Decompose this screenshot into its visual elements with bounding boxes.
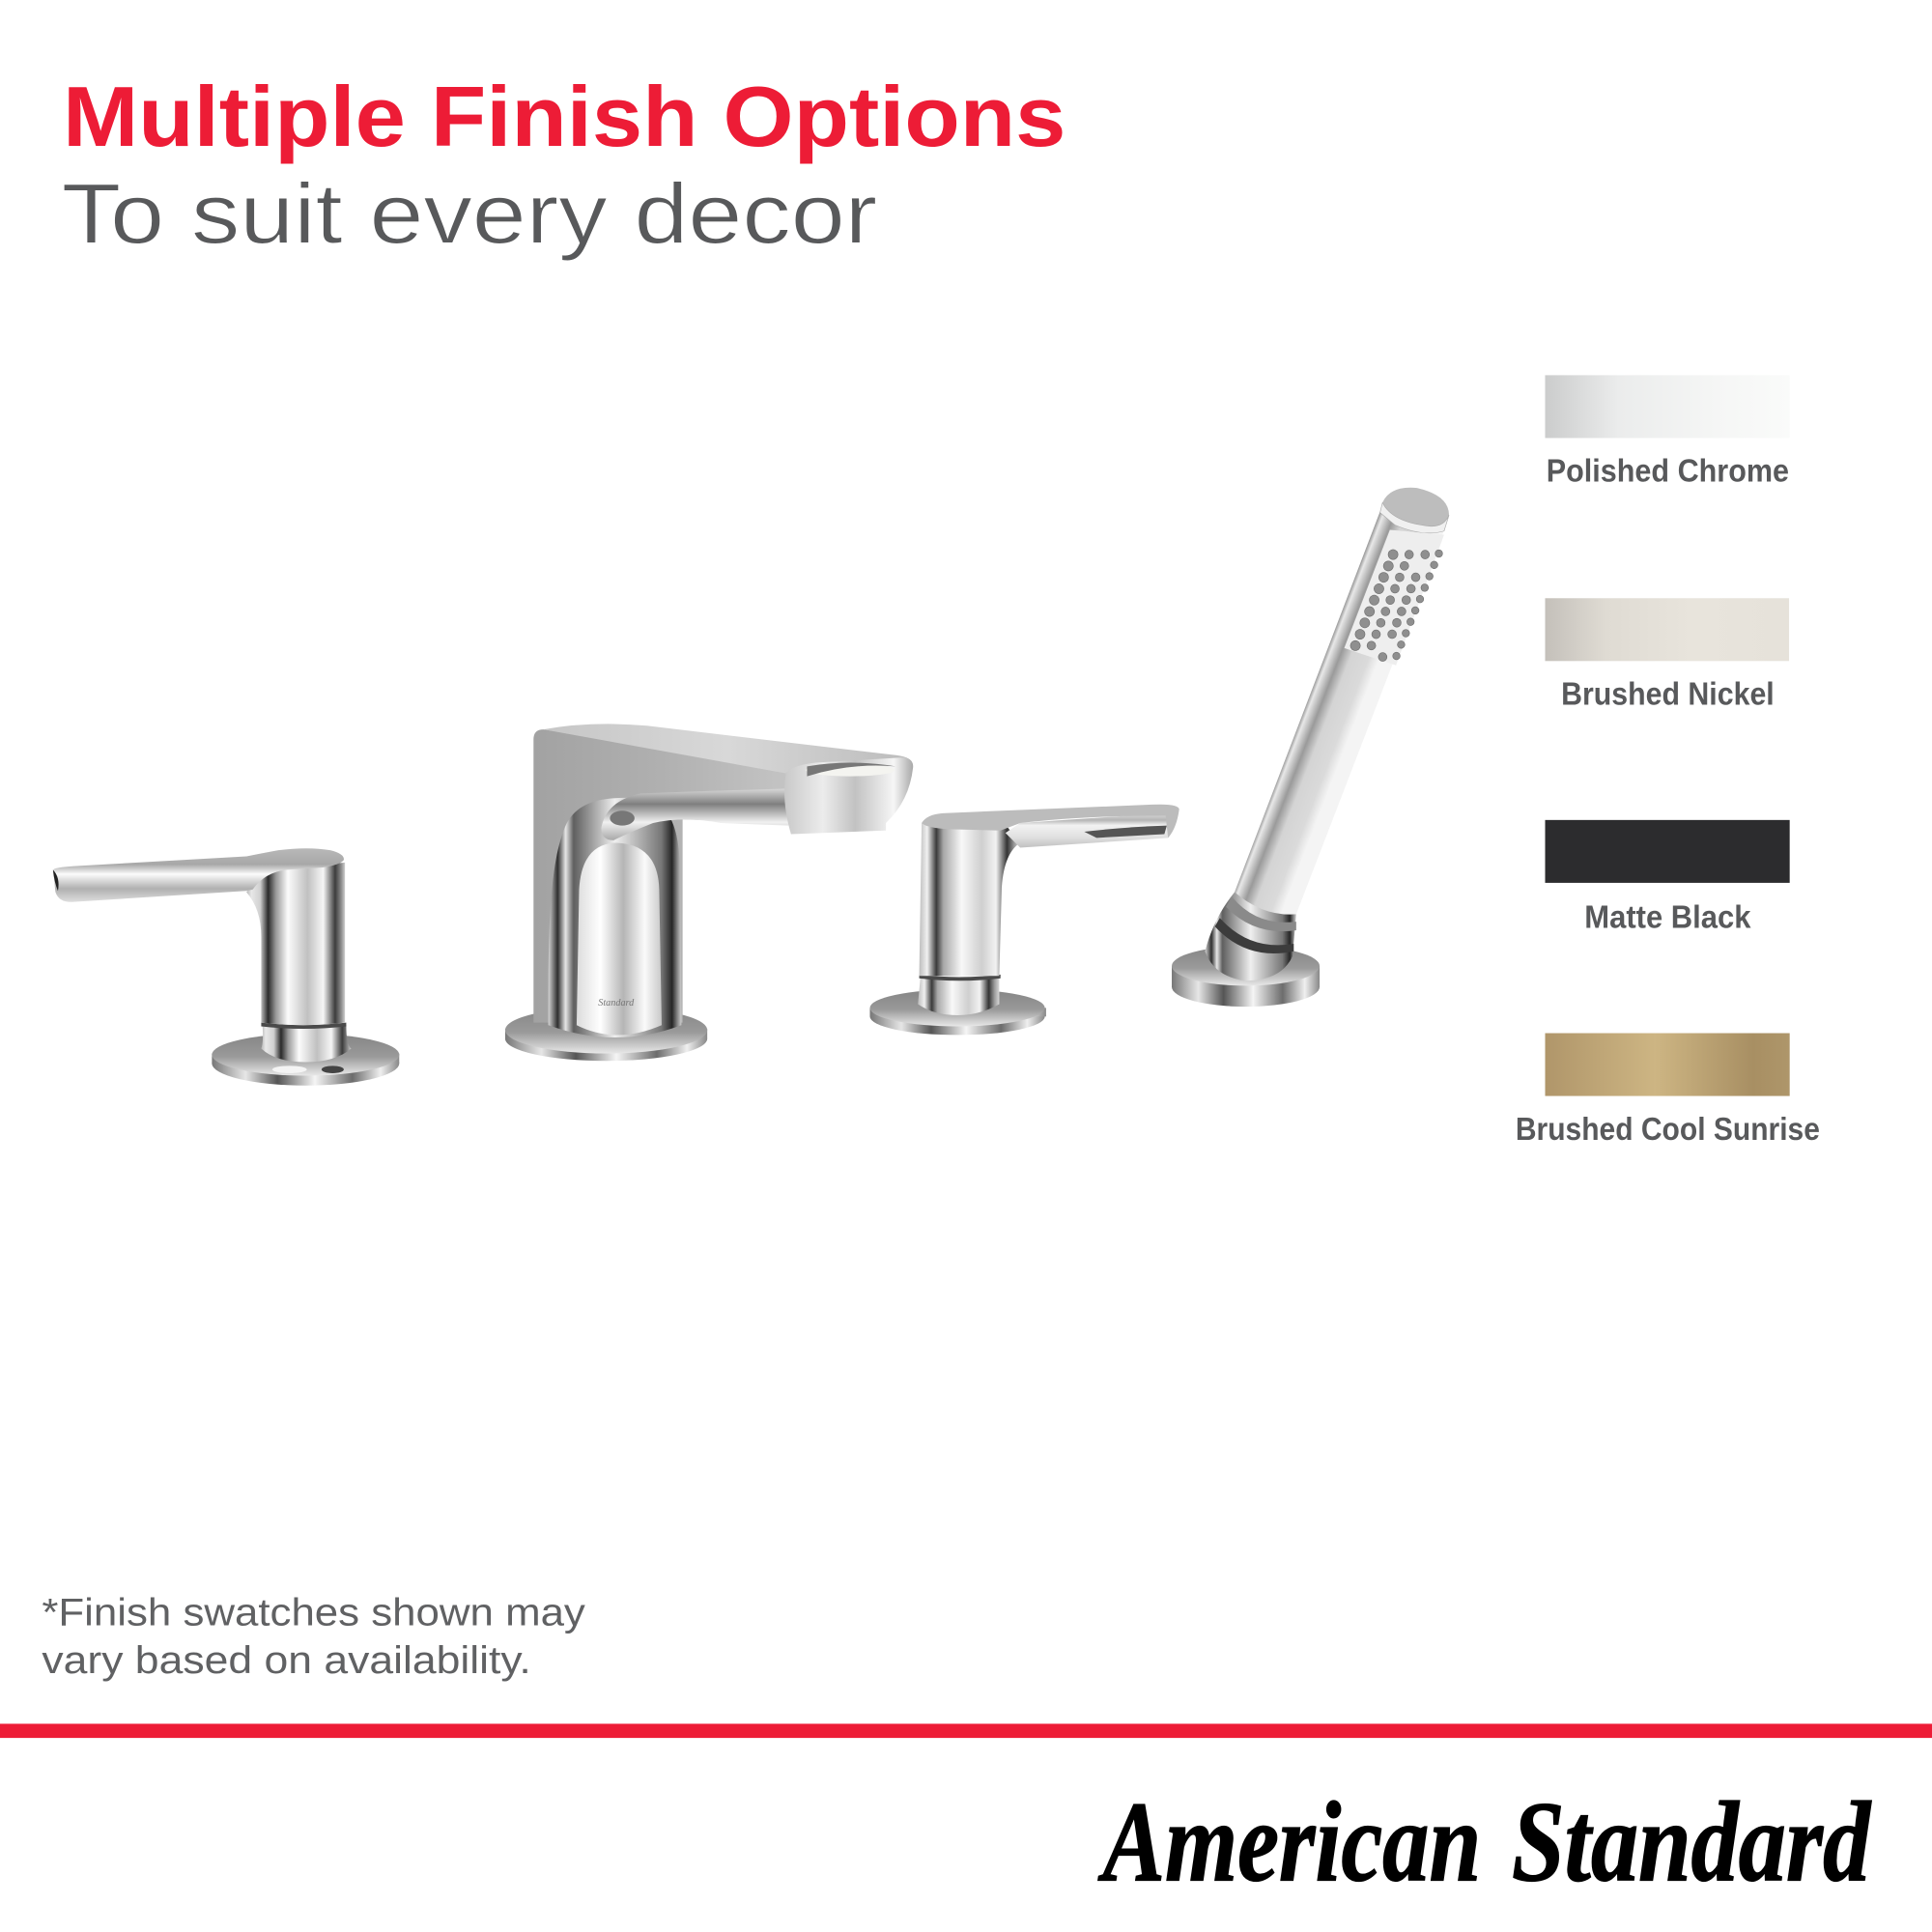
swatch: Brushed Cool Sunrise <box>1516 1034 1820 1148</box>
swatch: Polished Chrome: Polished Chrome <box>1547 454 1789 490</box>
footnote: vary based on availability. <box>42 1639 531 1682</box>
heading: Multiple Finish Options: Multiple Finish Options <box>63 69 1065 164</box>
swatch: Polished Chrome <box>1545 375 1790 490</box>
swatch: Brushed Nickel: Brushed Nickel <box>1561 677 1775 713</box>
swatch: Brushed Nickel <box>1545 598 1789 713</box>
footnote: *Finish swatches shown may <box>42 1591 585 1634</box>
spray nozzles <box>1349 532 1443 668</box>
red divider bar <box>0 1723 1932 1738</box>
small logo on spout: Standard <box>598 998 635 1009</box>
hand shower <box>1172 488 1449 1007</box>
finish swatches <box>1516 375 1820 1148</box>
center spout <box>505 724 913 1061</box>
hose collar <box>1205 892 1296 980</box>
swatch: Matte Black: Matte Black <box>1584 899 1751 935</box>
swatch: Brushed Cool Sunrise: Brushed Cool Sunrise <box>1516 1112 1820 1148</box>
subheading: To suit every decor: To suit every decor <box>62 165 877 261</box>
brand logo: American Standard: Standard <box>1512 1777 1872 1905</box>
brand logo: American Standard: American <box>1097 1777 1481 1905</box>
brand logo: American Standard <box>1097 1777 1872 1905</box>
footnote <box>42 1591 585 1682</box>
left lever handle <box>53 848 399 1086</box>
product: faucet set <box>53 488 1449 1086</box>
swatch: Matte Black <box>1545 820 1790 935</box>
title <box>62 69 1065 261</box>
right lever handle <box>870 805 1179 1035</box>
